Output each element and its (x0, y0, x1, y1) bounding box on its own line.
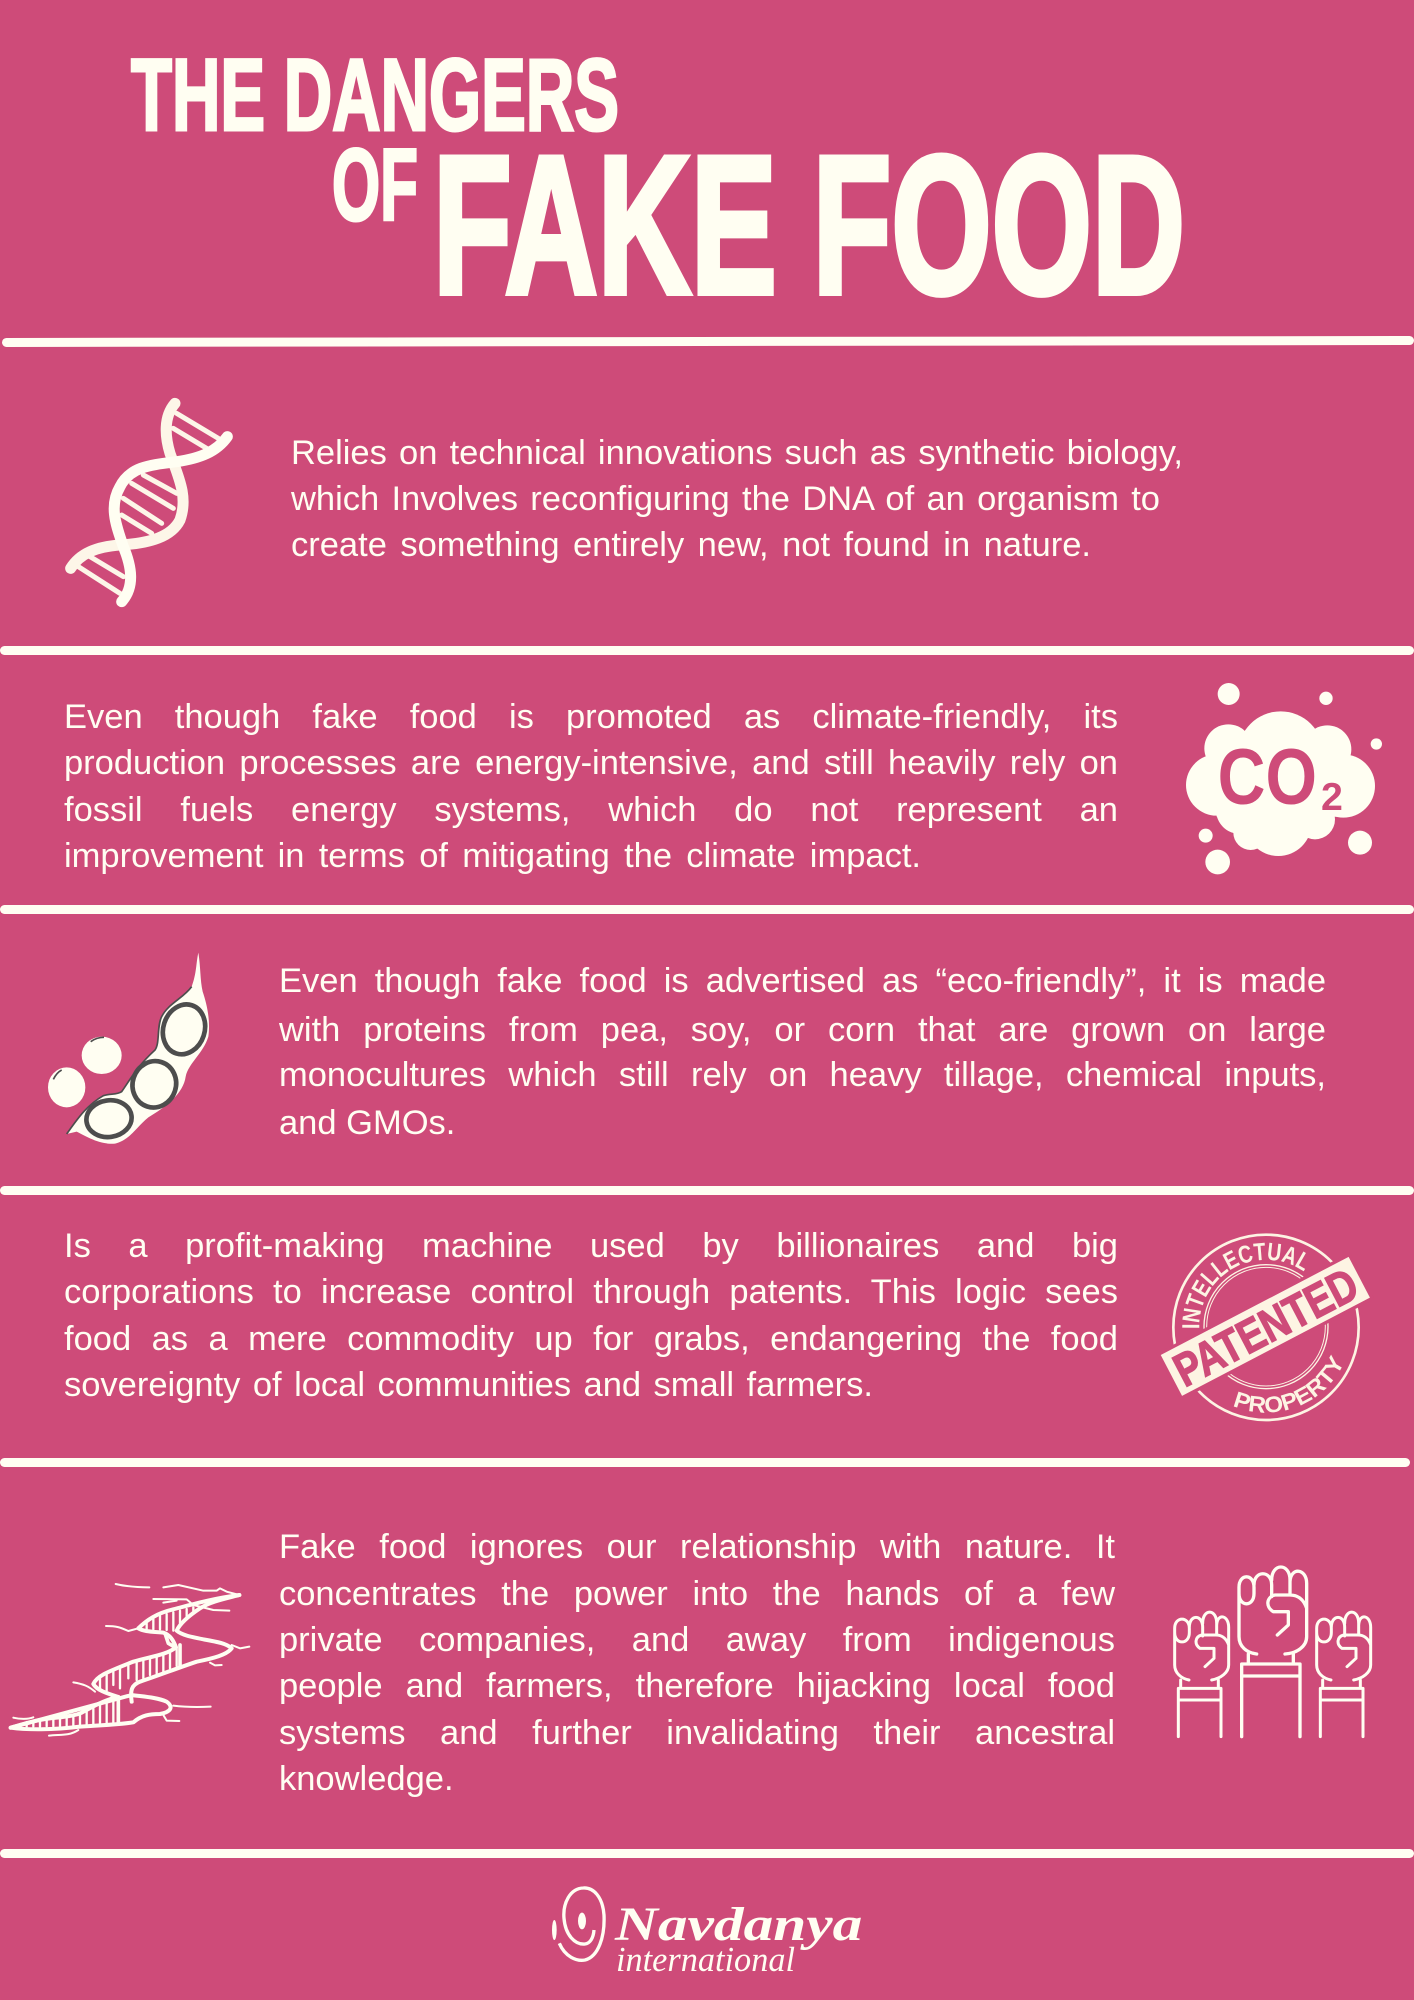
text block: relationship with nature (279, 1528, 1116, 1798)
text: with proteins from pea, soy, or corn that are grown on large (279, 1011, 1326, 1049)
text: Even though fake food is advertised as “eco-friendly”, it is made (279, 962, 1326, 1000)
icon: DNA helix (65, 398, 233, 608)
text: private companies, and away from indigenous (279, 1621, 1115, 1659)
text: Fake food ignores our relationship with nature. It (279, 1528, 1115, 1566)
text: sovereignty of local communities and small farmers. (64, 1366, 873, 1404)
icon: centre fist (1239, 1567, 1307, 1737)
icon: patented stamp: PATENTED (1165, 1258, 1366, 1397)
logo: Navdanya international: international (616, 1940, 795, 1979)
text: knowledge. (279, 1760, 454, 1798)
icon: CO2 cloud (1186, 683, 1382, 874)
icon: right fist (1317, 1612, 1371, 1737)
icon: CO2 cloud: 2 (1321, 775, 1343, 819)
text: Even though fake food is promoted as climate-friendly, its (64, 698, 1118, 736)
icon: raised fists (1173, 1565, 1372, 1738)
text: Relies on technical innovations such as synthetic biology, (291, 434, 1183, 472)
icon: bean pod (48, 952, 209, 1144)
text: production processes are energy-intensive, and still heavily rely on (64, 744, 1118, 782)
icon: CO2 cloud: CO (1218, 732, 1317, 820)
icon: patented stamp: PROPERTY (1234, 1354, 1342, 1413)
title (130, 40, 1185, 320)
text: people and farmers, therefore hijacking local food (279, 1667, 1115, 1705)
text: food as a mere commodity up for grabs, endangering the food (64, 1320, 1118, 1358)
logo: Navdanya international (552, 1886, 862, 1979)
text block: monocultures (279, 962, 1326, 1142)
text: fossil fuels energy systems, which do not represent an (64, 791, 1118, 829)
title: THE DANGERS (131, 40, 619, 152)
title: OF (332, 128, 418, 242)
text block: synthetic biology (291, 434, 1183, 564)
text: which Involves reconfiguring the DNA of an organism to (291, 480, 1160, 518)
text block: patents (64, 1227, 1118, 1404)
text: improvement in terms of mitigating the climate impact. (64, 837, 921, 875)
logo: Navdanya international: Navdanya (614, 1898, 862, 1951)
text: and GMOs. (279, 1104, 455, 1142)
icon: ground fissure (8, 1583, 250, 1737)
icon: patented stamp: INTELLECTUAL (1182, 1242, 1306, 1328)
text: monocultures which still rely on heavy tillage, chemical inputs, (279, 1056, 1326, 1094)
text: corporations to increase control through patents. This logic sees (64, 1273, 1118, 1311)
text: systems and further invalidating their ancestral (279, 1714, 1115, 1752)
text: create something entirely new, not found in nature. (291, 526, 1091, 564)
text: concentrates the power into the hands of a few (279, 1575, 1115, 1613)
text: Is a profit-making machine used by billionaires and big (64, 1227, 1118, 1265)
icon: left fist (1175, 1612, 1229, 1737)
text block: climate (64, 698, 1118, 875)
